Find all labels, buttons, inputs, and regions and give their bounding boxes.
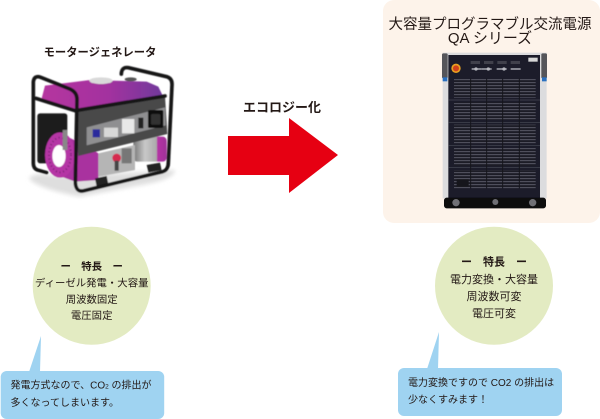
features list: 周波数可変 <box>466 290 522 303</box>
panel title: 大容量プログラマブル交流電源 <box>388 17 592 33</box>
panel: QA series <box>383 0 600 223</box>
features list: 電力変換・大容量 <box>450 272 538 286</box>
circle: left features <box>33 227 151 345</box>
features heading: ー 特長 ー <box>61 260 123 273</box>
features list: 周波数固定 <box>66 293 118 306</box>
label: ecology: エコロジー化 <box>243 100 321 115</box>
features heading: ー 特長 ー <box>461 254 527 268</box>
features list: 電圧可変 <box>472 307 516 320</box>
features list: 電圧固定 <box>71 310 112 322</box>
callout text: 電力変換ですので CO2 の排出は <box>408 376 554 389</box>
callout text: 多くなってしまいます。 <box>10 396 119 409</box>
features list: ディーゼル発電・大容量 <box>35 276 148 290</box>
arrow: to the right <box>228 118 338 193</box>
label: motor generator: モータージェネレータ <box>44 46 156 59</box>
icon: motor generator <box>30 68 175 197</box>
callout: left note <box>1 336 164 419</box>
callout text: 発電方式なので、CO2 の排出が <box>10 380 152 392</box>
callout text: 少なくすみます！ <box>408 393 488 406</box>
callout: right note <box>398 332 562 416</box>
circle: right features <box>435 227 553 345</box>
panel title: QA シリーズ <box>448 30 532 47</box>
icon: QA power supply unit <box>442 53 547 208</box>
